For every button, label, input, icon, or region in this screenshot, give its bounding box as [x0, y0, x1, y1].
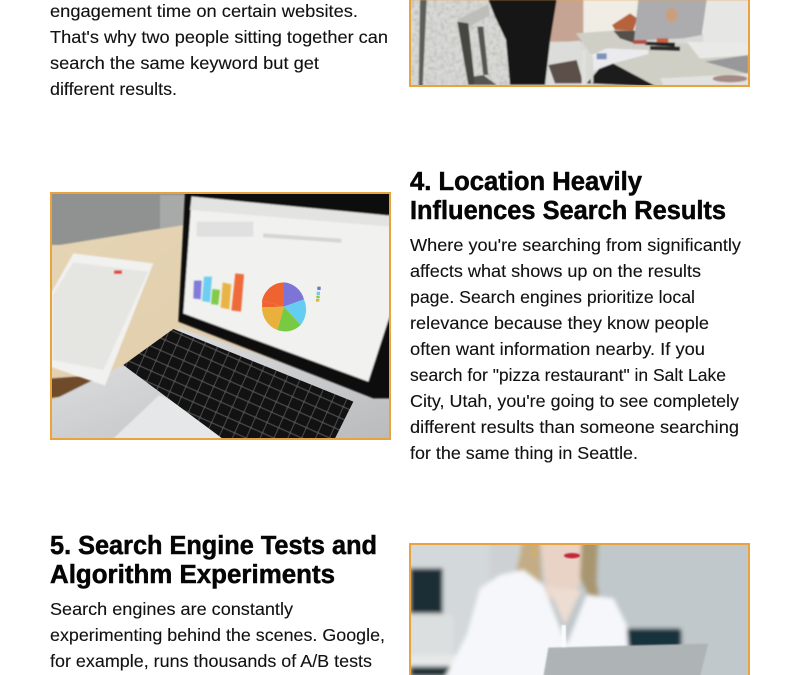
text block: section 4 body: affects what shows up on the results [410, 261, 701, 281]
text block: section 5 body: experimenting behind the scenes. Google, [50, 625, 385, 645]
text block: section 4 body: City, Utah, you're going to see completely [410, 391, 739, 411]
text block: section 3 ending [50, 1, 388, 99]
text block: section 4 body: Where you're searching from significantly [410, 235, 741, 255]
text block: section 5 body [50, 599, 385, 671]
heading: section 5 [50, 532, 377, 589]
text block: section 5 body: for example, runs thousands of A/B tests [50, 651, 372, 671]
text block: section 3 ending: different results. [50, 79, 177, 99]
text block: section 4 body: often want information nearby. If you [410, 339, 705, 359]
text block: section 4 body: different results than someone searching [410, 417, 739, 437]
text block: section 4 body: search for "pizza restaurant" in Salt Lake [410, 365, 726, 385]
text block: section 3 ending: search the same keyword but get [50, 53, 319, 73]
text block: section 3 ending: engagement time on certain websites. [50, 1, 358, 21]
photo: people at a desk with laptop [409, 0, 750, 87]
heading: section 4 [410, 168, 726, 225]
heading: section 5: 5. Search Engine Tests and [50, 532, 377, 560]
heading: section 4: Influences Search Results [410, 197, 726, 225]
text block: section 3 ending: That's why two people sitting together can [50, 27, 388, 47]
text block: section 4 body: for the same thing in Seattle. [410, 443, 638, 463]
photo: woman in white shirt with laptop [407, 540, 757, 675]
heading: section 4: 4. Location Heavily [410, 168, 643, 196]
text block: section 5 body: Search engines are constantly [50, 599, 293, 619]
text block: section 4 body: page. Search engines prioritize local [410, 287, 695, 307]
photo: laptop with charts and tablet [50, 192, 393, 442]
text block: section 4 body: relevance because they know people [410, 313, 709, 333]
heading: section 5: Algorithm Experiments [50, 561, 335, 589]
text block: section 4 body [410, 235, 741, 463]
